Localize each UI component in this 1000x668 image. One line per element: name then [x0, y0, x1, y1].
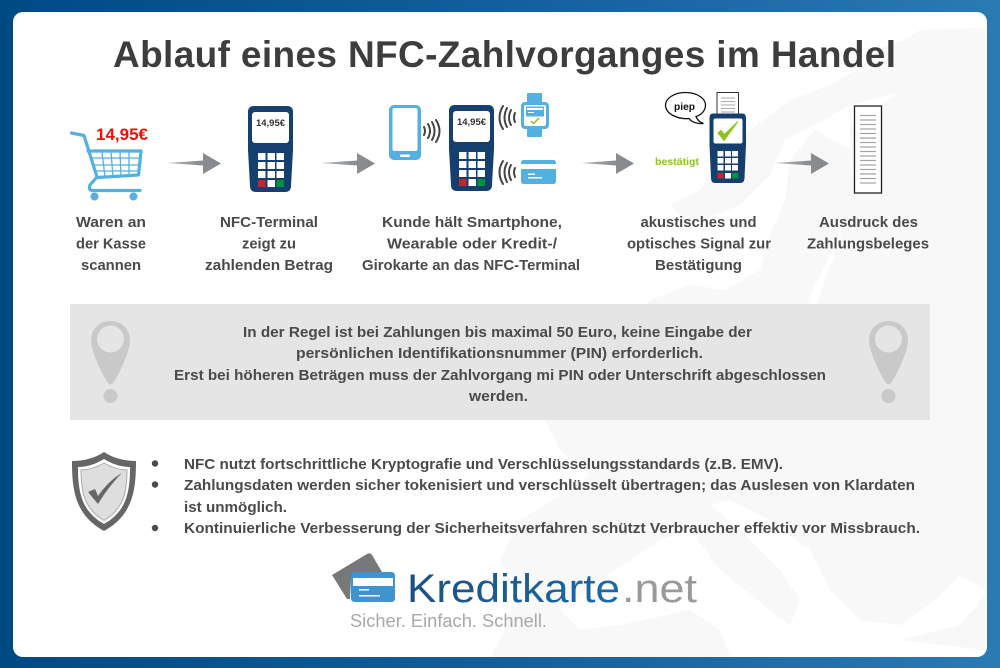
security bullet list: NFC nutzt fortschrittliche Kryptografie und Verschlüsselungsstandards (z.B. EMV). [184, 456, 783, 473]
caption 3: Wearable oder Kredit-/ [387, 236, 558, 252]
caption 4: Bestätigung [655, 257, 742, 274]
security bullet list [152, 456, 920, 537]
title: Ablauf eines NFC-Zahlvorganges im Handel [113, 34, 896, 75]
caption 3: Girokarte an das NFC-Terminal [362, 257, 580, 274]
step 4: confirmation [655, 92, 746, 183]
icon: security shield [72, 452, 136, 531]
note text: Erst bei höheren Beträgen muss der Zahlvorgang mi PIN oder Unterschrift abgeschlossen [174, 367, 826, 384]
step 3: devices [389, 93, 556, 191]
caption 2: zahlenden Betrag [205, 257, 333, 274]
caption 1: scannen [81, 257, 141, 274]
icon: credit card [521, 160, 556, 184]
caption 3: Kunde hält Smartphone, [382, 214, 562, 231]
icon: waves lower [500, 161, 515, 184]
logo: Kreditkarte.net [332, 553, 697, 631]
caption 3 [362, 214, 580, 274]
caption 5 [807, 214, 929, 252]
bullets [152, 460, 158, 531]
step 2: terminal: 14,95€ [256, 118, 285, 128]
europe map watermark [490, 28, 985, 657]
icon: smartwatch [521, 93, 549, 137]
terminal with check [710, 114, 746, 183]
caption 5: Ausdruck des [819, 214, 918, 231]
security bullet list: Zahlungsdaten werden sicher tokenisiert und verschlüsselt übertragen; das Auslesen von Klardaten [184, 477, 915, 494]
note text: werden. [468, 388, 528, 405]
speech bubble: piep [674, 101, 695, 113]
caption 4: optisches Signal zur [627, 236, 771, 252]
icon: exclamation pin left [91, 321, 130, 403]
caption 5: Zahlungsbeleges [807, 236, 929, 252]
step 1: shopping cart [72, 125, 149, 200]
icon: terminal: 14,95€ [457, 117, 486, 127]
arrow 3 [581, 153, 634, 174]
caption 1 [76, 214, 146, 274]
arrow 1 [167, 153, 221, 174]
caption 4: akustisches und [640, 214, 756, 231]
icon: cart [72, 133, 141, 200]
caption 2: NFC-Terminal [220, 214, 318, 231]
confirmed label: bestätigt [655, 156, 699, 168]
icon: waves upper [500, 106, 515, 129]
logo: Kreditkarte.net: .net [622, 567, 697, 611]
panel: PIN note [70, 304, 930, 420]
step 5: receipt [854, 106, 882, 193]
caption 2 [205, 214, 333, 274]
icon: waves right [424, 120, 440, 142]
icon: smartphone [389, 105, 421, 160]
security bullet list: Kontinuierliche Verbesserung der Sicherheitsverfahren schützt Verbraucher effektiv vor Missbrauch. [184, 520, 920, 537]
caption 2: zeigt zu [242, 236, 296, 252]
note text: persönlichen Identifikationsnummer (PIN) erforderlich. [296, 345, 703, 362]
note text: In der Regel ist bei Zahlungen bis maximal 50 Euro, keine Eingabe der [243, 324, 752, 341]
icon: exclamation pin right [869, 321, 908, 403]
note text [174, 324, 826, 405]
security bullet list: ist unmöglich. [184, 499, 287, 516]
arrow 2 [321, 153, 375, 174]
logo tagline: Sicher. Einfach. Schnell. [350, 610, 547, 631]
caption 4 [627, 214, 771, 274]
icon: terminal [449, 105, 494, 191]
price: 14,95€ [96, 125, 149, 144]
logo icon: cards [332, 553, 395, 602]
paper slip [717, 92, 738, 116]
caption 1: Waren an [76, 214, 146, 231]
logo wordmark: Kreditkarte [407, 567, 620, 611]
caption 1: der Kasse [76, 236, 146, 252]
step 2: terminal [248, 106, 293, 192]
arrow 4 [775, 153, 829, 174]
